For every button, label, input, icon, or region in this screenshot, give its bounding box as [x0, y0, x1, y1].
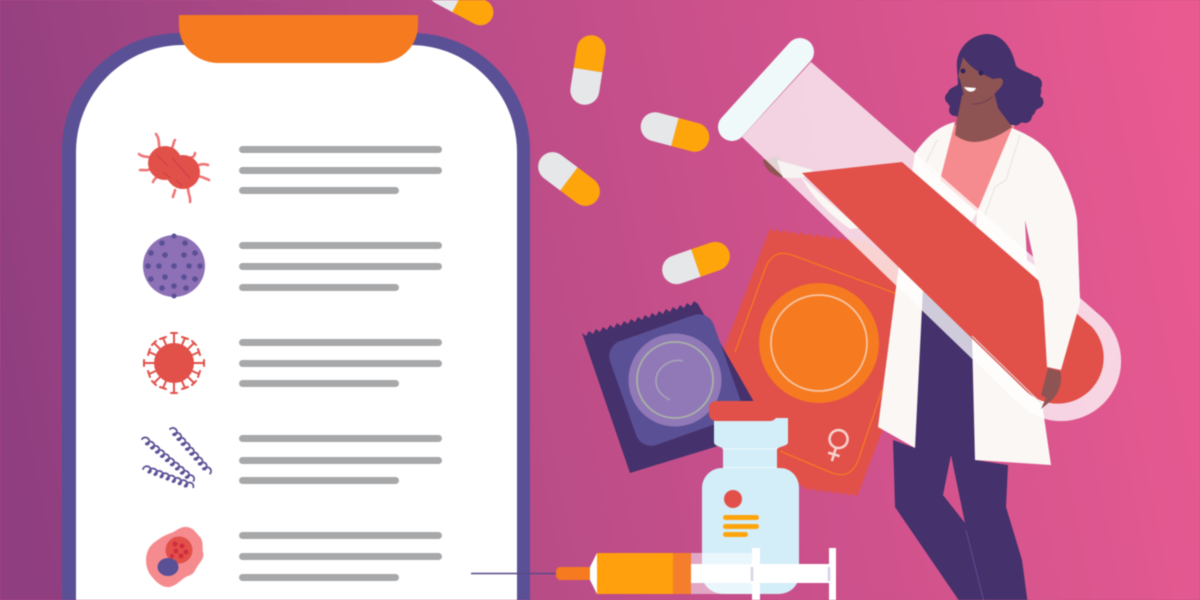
- lab coat: [878, 122, 1080, 465]
- neck: [955, 88, 1012, 142]
- pants: [893, 280, 1028, 600]
- panel: clipboard: [62, 15, 530, 600]
- icon: purple cell: [143, 234, 205, 298]
- left hand: [762, 156, 784, 178]
- coat details: [925, 135, 1020, 215]
- right hand: [1041, 368, 1061, 409]
- vial: [702, 401, 799, 594]
- icon: spirochetes: [141, 426, 213, 489]
- condom packet: red: [700, 228, 935, 497]
- test tube glass: [742, 62, 1121, 421]
- condom packet: purple: [582, 301, 770, 473]
- test tube cap: [732, 52, 800, 127]
- right sleeve over tube: [1025, 220, 1080, 371]
- left cuff: [777, 160, 813, 178]
- pill upper: [568, 33, 608, 107]
- pill lower: [658, 238, 734, 288]
- icon: infected cell: [146, 527, 203, 587]
- clipboard clip: [179, 15, 418, 63]
- face: [958, 57, 1003, 106]
- pill lower left: [532, 146, 606, 212]
- icon: mite: [139, 134, 209, 202]
- test tube liquid: [802, 162, 1104, 404]
- icon: female symbol: [823, 428, 850, 464]
- text placeholder lines: [239, 146, 442, 581]
- gap between arm and coat: [1024, 221, 1035, 266]
- pill right: [637, 109, 713, 155]
- character: health worker: [732, 34, 1121, 600]
- pill top: [424, 0, 498, 30]
- shirt: [938, 125, 1015, 215]
- icon: virus: [144, 333, 204, 393]
- hair: [945, 34, 1044, 126]
- syringe: [471, 548, 836, 600]
